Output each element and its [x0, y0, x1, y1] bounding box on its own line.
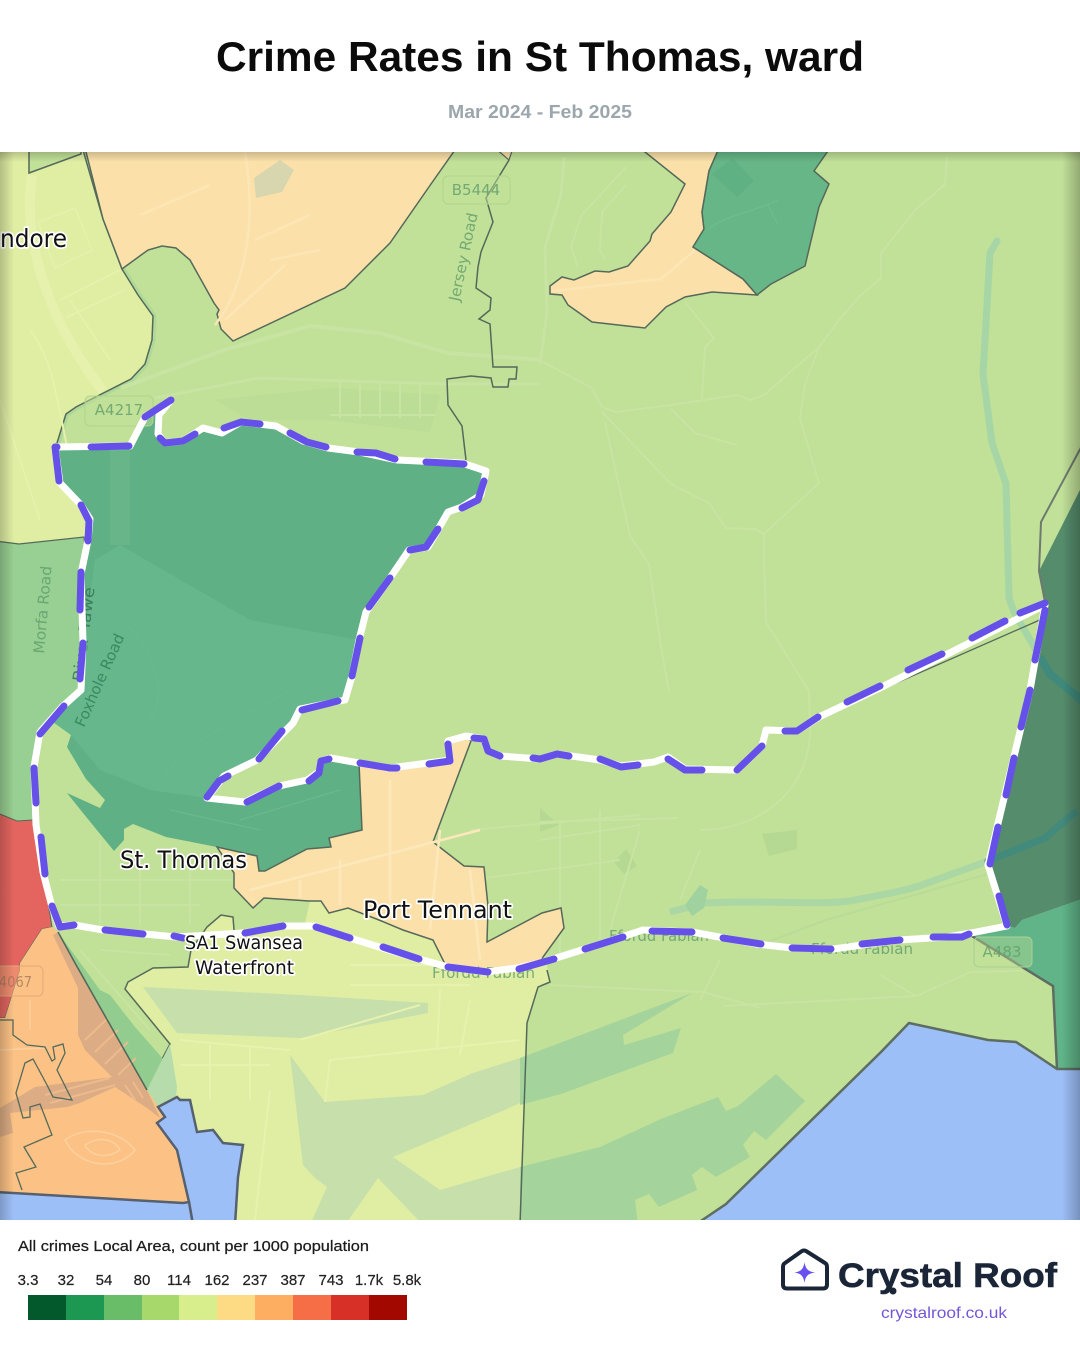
map edge shading	[0, 152, 1080, 1220]
thin line below boundary	[878, 619, 1042, 691]
legend scale values: 5.8k	[393, 1272, 422, 1289]
orange zone built-up band	[0, 932, 160, 1137]
logo: Crystal Roof	[783, 1250, 1058, 1322]
area: south-east green	[972, 898, 1080, 1069]
place label: St. Thomas: St. Thomas	[120, 846, 247, 874]
logo y-descender dot	[890, 1288, 896, 1294]
area: top-left small green	[29, 140, 81, 173]
area: coastal pale zone	[125, 901, 550, 1225]
faint green patches	[215, 388, 797, 874]
road label: Morfa Road: Morfa Road	[30, 565, 56, 654]
orange zone internal boundary	[0, 1020, 72, 1190]
place label: Landore fragment: ndore	[0, 224, 67, 253]
road label: Jersey Road: Jersey Road	[445, 211, 482, 304]
road shield: B5444: B5444	[452, 181, 500, 199]
lighter forest band	[53, 545, 359, 798]
title: Crime Rates in St Thomas, ward	[216, 33, 864, 80]
road shield: A4217: A4217	[95, 401, 143, 419]
coastal zone outline	[125, 915, 234, 1090]
pale zone streets	[0, 270, 125, 520]
area: top-right peach zone	[550, 148, 757, 328]
water: left dock	[157, 1097, 243, 1225]
river edge shading beside north-west line	[57, 153, 153, 443]
peach overlay: Port Tennant	[217, 736, 564, 972]
road label: Ffordd Fabian east: Ffordd Fabian	[811, 940, 913, 958]
legend scale values: 3.3	[18, 1272, 38, 1289]
dock area east A	[520, 993, 692, 1105]
logo wordmark: Crystal Roof	[838, 1257, 1058, 1295]
website url: crystalroof.co.uk	[881, 1305, 1008, 1322]
stadium outline	[38, 208, 92, 268]
darker square in green zone	[712, 158, 754, 197]
ward divider line south	[520, 970, 550, 1225]
south-east coastline	[972, 936, 1057, 1069]
peach road	[552, 250, 695, 291]
strip along railway	[60, 935, 164, 1090]
area: dark green forest inside boundary	[53, 400, 486, 871]
legend scale values: 1.7k	[355, 1272, 384, 1289]
place label: SA1 Swansea Waterfront	[185, 932, 303, 979]
legend scale values: 237	[242, 1272, 268, 1289]
east boundary line	[1039, 440, 1080, 602]
legend scale values: 80	[134, 1272, 150, 1289]
track in green zone	[709, 200, 778, 229]
subtitle: date range: Mar 2024 - Feb 2025	[448, 102, 632, 122]
pale zone waterfront streets	[180, 965, 520, 1220]
road shield: A4217	[85, 396, 153, 426]
dock basin lower	[290, 1055, 520, 1225]
legend scale values: 114	[167, 1272, 191, 1289]
area: red zone	[0, 812, 52, 1018]
legend scale values: 32	[58, 1272, 74, 1289]
legend colour swatches	[28, 1295, 407, 1320]
legend scale values: 387	[280, 1272, 306, 1289]
area: small peach notch	[495, 148, 513, 160]
road label: Ffordd Fabian centre: Ffordd Fabian	[432, 964, 535, 982]
place label: SA1 Swansea Waterfront: SA1 Swansea	[185, 932, 303, 954]
pale main road	[30, 175, 103, 391]
area: east dark green	[988, 480, 1080, 928]
legend	[18, 1238, 422, 1320]
water: bottom-left	[0, 1192, 193, 1225]
road shield: A483	[974, 937, 1032, 967]
road label: Ffordd Fabian west: Ffordd Fabian	[609, 927, 709, 945]
ward divider line north	[447, 160, 517, 460]
legend scale values: 743	[318, 1272, 344, 1289]
ward boundary: purple dashes	[34, 400, 1045, 972]
area: orange zone	[0, 927, 189, 1202]
area: left mid green	[0, 537, 90, 825]
road label: River Tawe: River Tawe	[69, 586, 99, 682]
canal over dark area	[988, 813, 1074, 861]
legend title: All crimes Local Area, count per 1000 population	[18, 1238, 369, 1255]
area: top peach zone	[83, 140, 462, 341]
road shield: B5444	[443, 176, 510, 204]
forest tracks	[120, 620, 340, 830]
streets in Port Tennant	[250, 780, 480, 960]
road label: Foxhole Road: Foxhole Road	[71, 631, 128, 730]
water: Swansea Bay	[695, 1023, 1080, 1225]
dock basin upper	[143, 987, 428, 1038]
stream on east side	[983, 241, 1040, 657]
icon: house with star	[783, 1250, 827, 1288]
area: top-right green zone	[693, 148, 830, 295]
lake	[685, 885, 708, 916]
place label: Port Tennant: Port Tennant	[363, 896, 512, 924]
upper-left zone outline	[57, 150, 153, 443]
built-up band streets	[45, 1018, 143, 1103]
road through forest	[110, 448, 130, 545]
canal	[670, 861, 988, 912]
place label: SA1 Swansea Waterfront: Waterfront	[195, 957, 294, 979]
ward boundary: white base line	[34, 400, 1045, 972]
stream over dark area	[1040, 657, 1080, 703]
road shield: A483: A483	[983, 943, 1021, 961]
road shield: A4067	[0, 966, 43, 996]
legend scale values	[18, 1272, 422, 1289]
orange coast line	[58, 932, 147, 1090]
dock area east B	[520, 1074, 805, 1225]
map base: ward colour	[0, 152, 1080, 1220]
pond in peach zone	[254, 160, 294, 198]
coastal corner	[147, 1044, 177, 1107]
legend scale values: 162	[204, 1272, 230, 1289]
peach zone streets	[140, 152, 320, 325]
area: upper-left pale zone	[0, 140, 153, 544]
local roads	[60, 157, 1023, 1030]
orange zone estate roads	[0, 1000, 135, 1164]
legend scale values: 54	[96, 1272, 112, 1289]
